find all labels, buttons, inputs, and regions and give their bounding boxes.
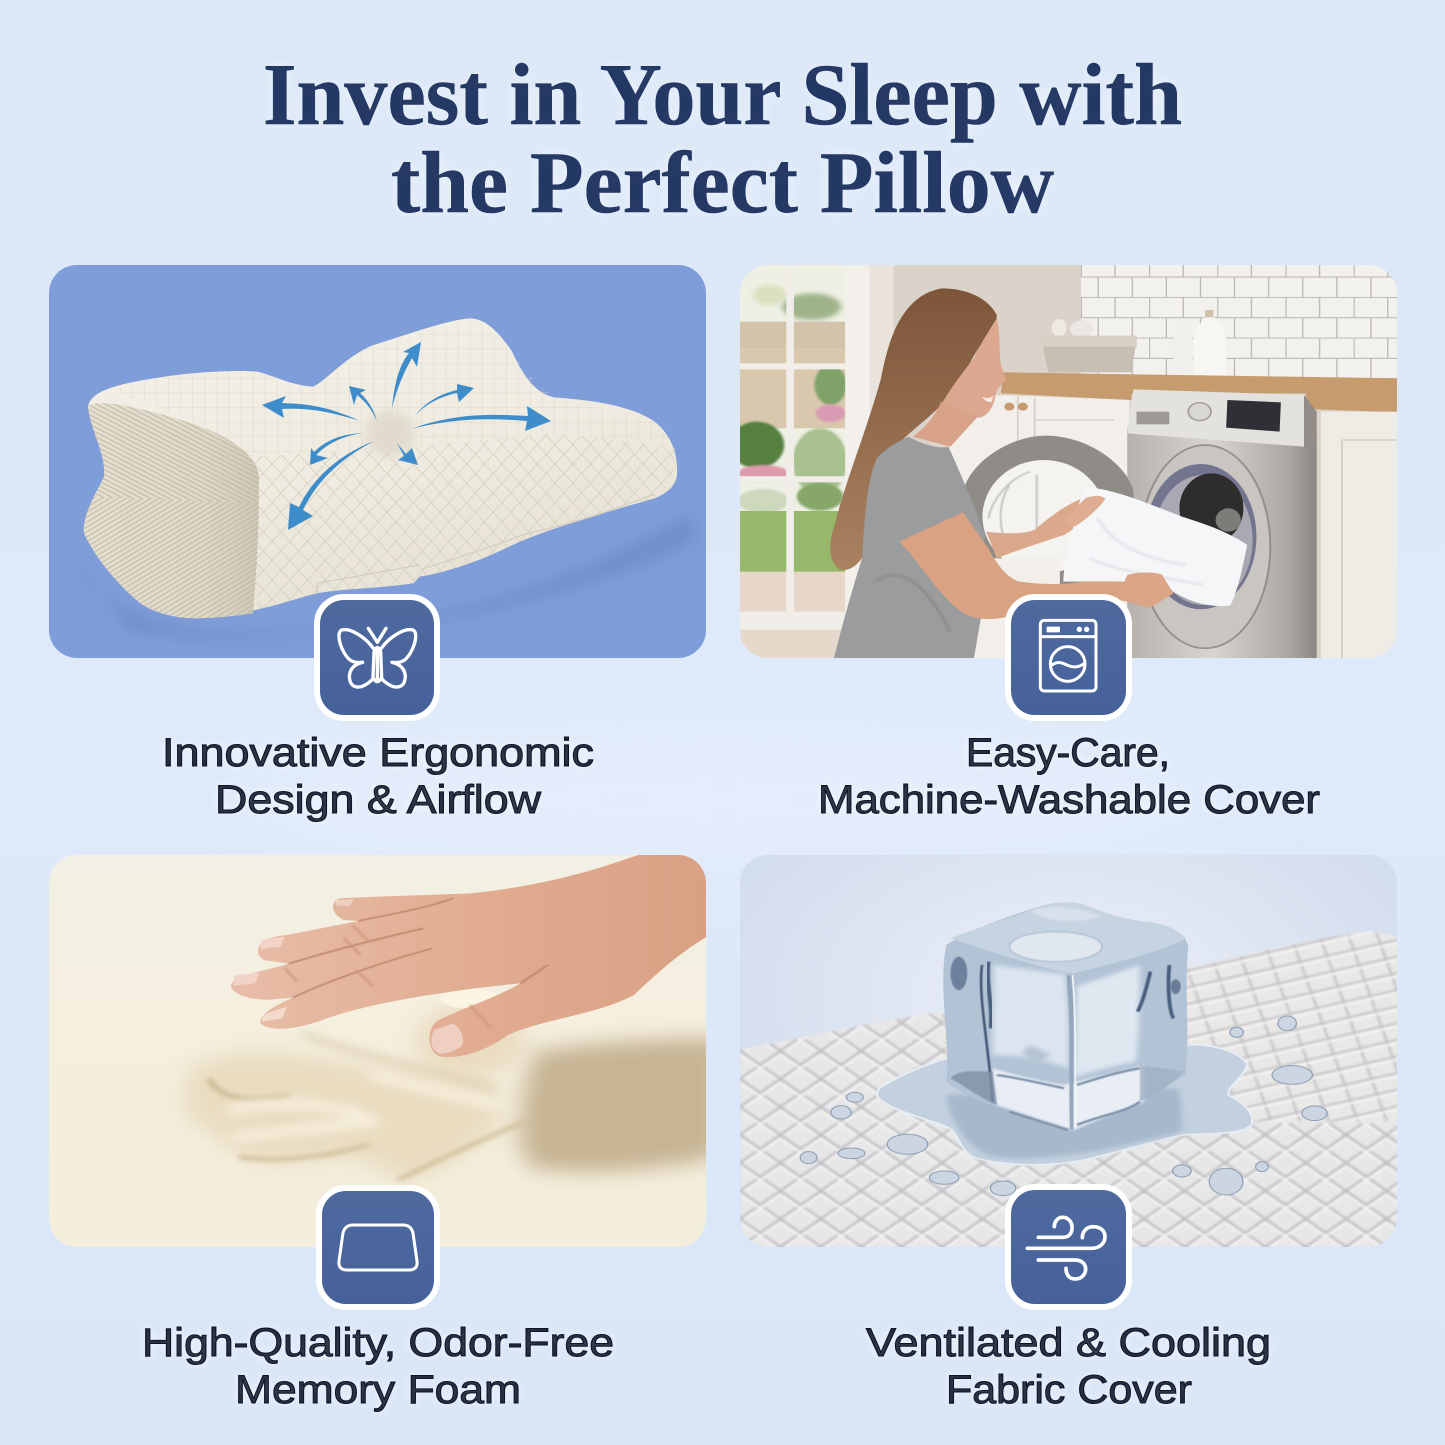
label: washable cover (818, 731, 1320, 822)
label: ergonomic design: Innovative Ergonomic (162, 731, 594, 775)
panel: memory foam handprint photo (49, 855, 722, 1250)
panel: ergonomic pillow photo (49, 265, 706, 658)
label: memory foam: Memory Foam (235, 1368, 521, 1412)
title: Invest in Your Sleep with (263, 47, 1182, 144)
label: washable cover: Easy-Care, (966, 731, 1170, 775)
label: washable cover: Machine-Washable Cover (818, 778, 1320, 822)
icon: washing machine (1008, 597, 1129, 718)
label: cooling fabric: Fabric Cover (946, 1368, 1192, 1412)
meltwater puddle (877, 1045, 1252, 1165)
icon: wind (1008, 1187, 1129, 1307)
pillow shadow (122, 521, 692, 632)
water droplets (800, 1016, 1327, 1196)
far arm (986, 499, 1080, 558)
ice cube (943, 902, 1188, 1132)
title (263, 47, 1182, 232)
label: memory foam: High-Quality, Odor-Free (142, 1321, 614, 1365)
fingernails (335, 899, 354, 906)
label: ergonomic design: Design & Airflow (215, 778, 541, 822)
tan foam shadow (520, 1038, 722, 1172)
title: the Perfect Pillow (391, 135, 1054, 232)
woman (830, 288, 1174, 660)
handprint impression (184, 1033, 525, 1183)
drum door (1140, 445, 1270, 648)
base cabinets (948, 393, 1129, 660)
label: cooling fabric: Ventilated & Cooling (866, 1321, 1271, 1365)
white cloth (1063, 488, 1247, 606)
hand (231, 855, 710, 1057)
icon: foam pad (319, 1188, 437, 1307)
label: cooling fabric (866, 1321, 1271, 1412)
quilted fabric (740, 932, 1401, 1250)
label: memory foam (142, 1321, 614, 1412)
tiled wall (1081, 265, 1401, 378)
grey tee (833, 437, 985, 660)
washing machine (1127, 389, 1317, 660)
hair (830, 288, 997, 570)
pillow (84, 318, 677, 618)
icon: butterfly (317, 597, 437, 718)
panel: woman at washing machine photo (729, 265, 1401, 660)
near arm (899, 512, 1174, 619)
pillow side panel (84, 403, 259, 618)
face (942, 318, 1006, 418)
shelf items (1041, 310, 1226, 375)
panel: ice cube on cooling fabric photo (740, 855, 1401, 1250)
countertop (1001, 372, 1400, 412)
label: ergonomic design (162, 731, 594, 822)
garden window (740, 265, 894, 658)
open washer door (965, 436, 1134, 598)
airflow arrows (262, 342, 551, 530)
